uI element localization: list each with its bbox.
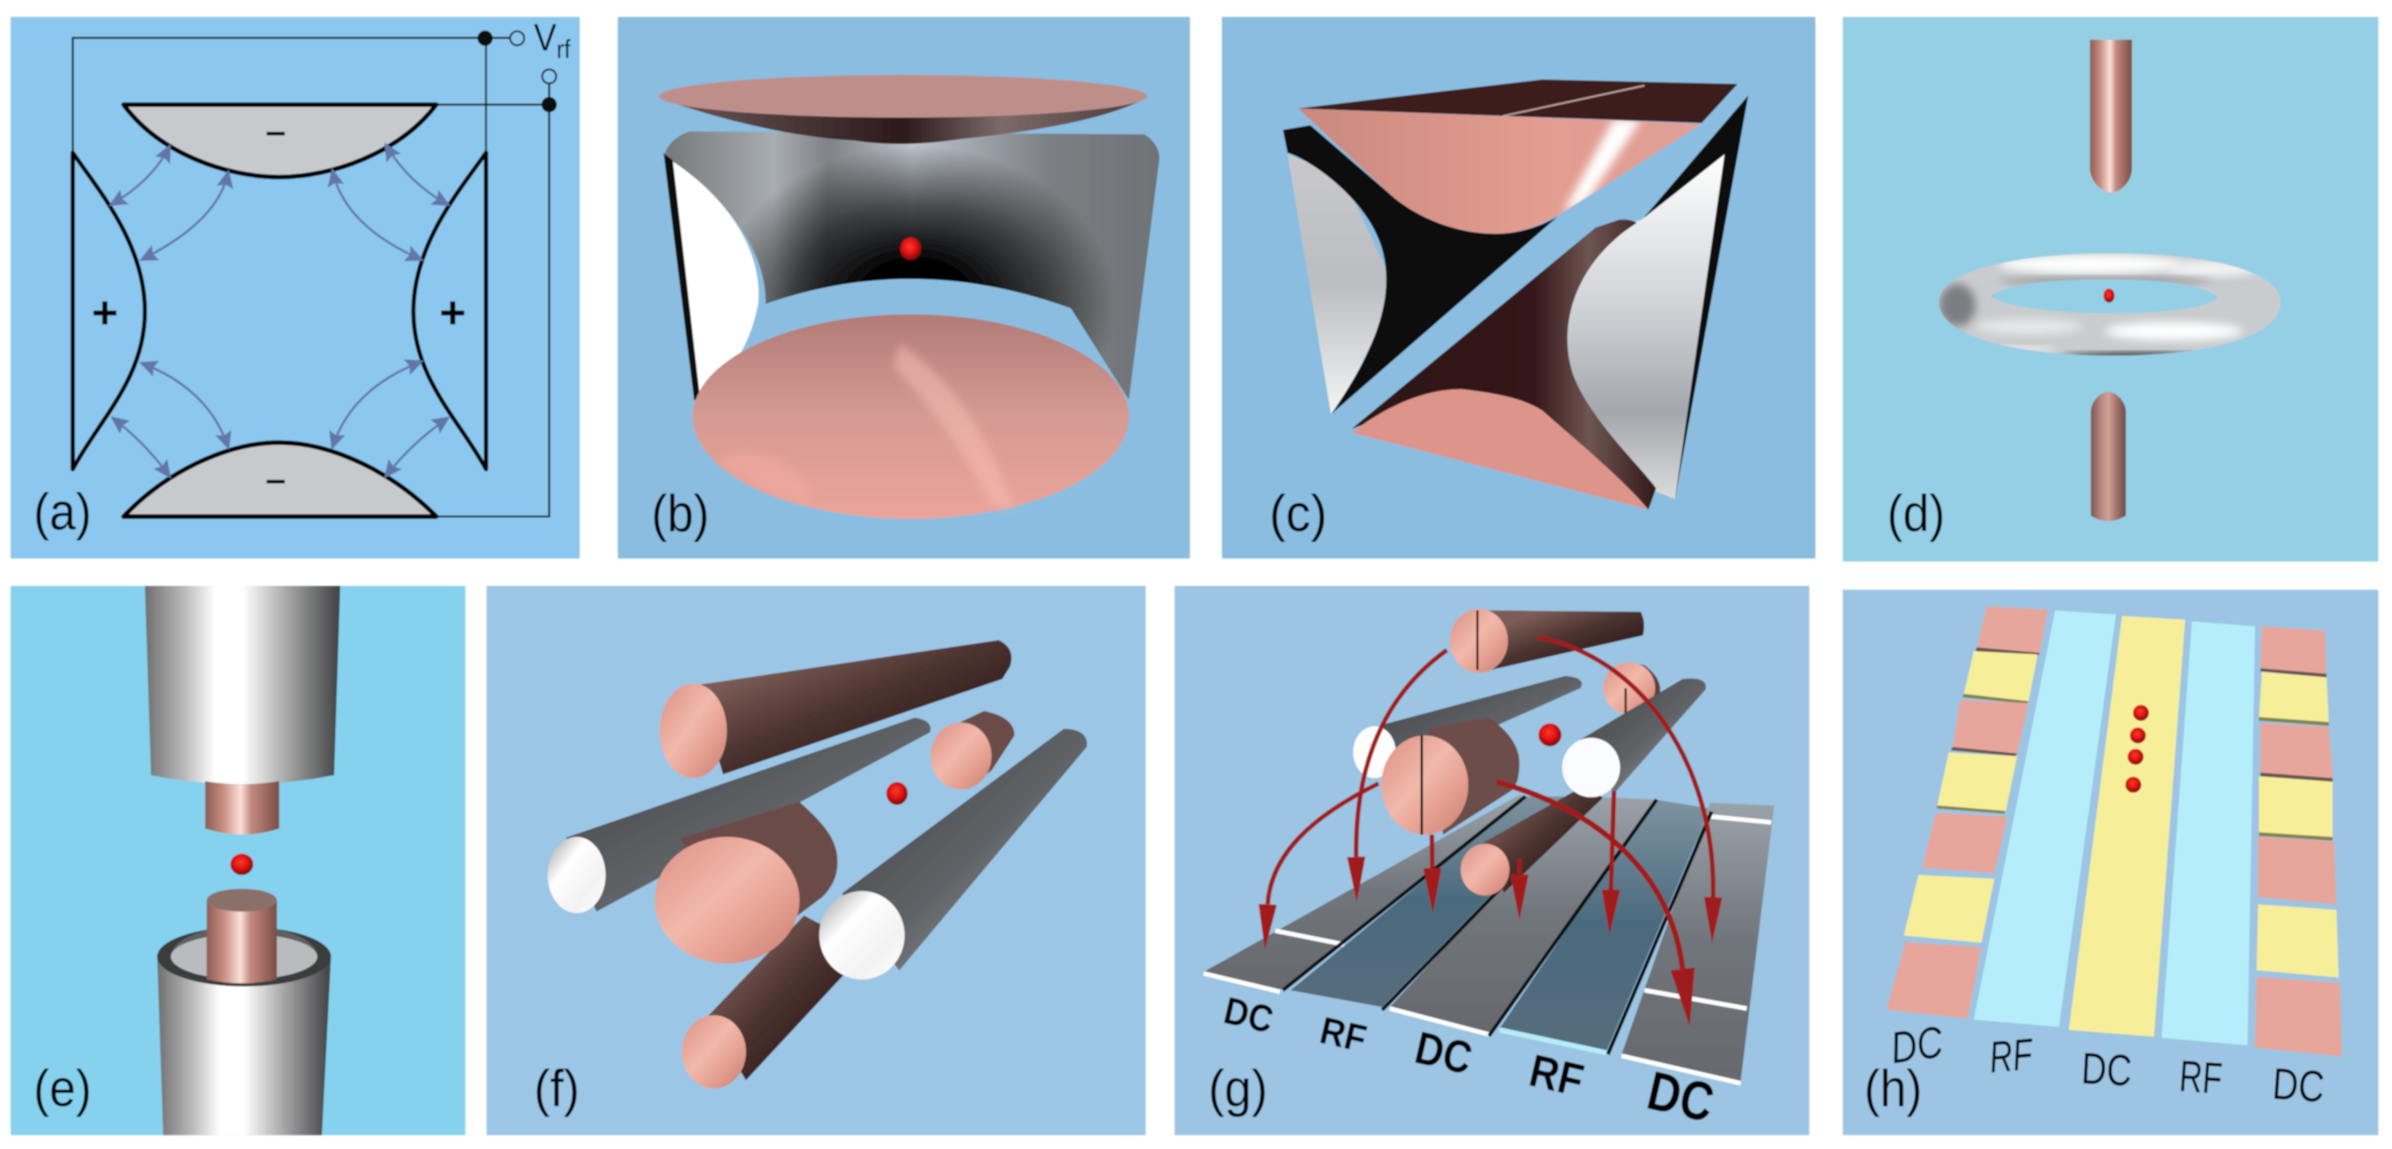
rod: large copper bbox=[655, 802, 838, 964]
strip labels: DC bbox=[1220, 989, 1277, 1042]
strip labels: RF bbox=[1987, 1030, 2036, 1083]
rod: upper grey bbox=[1353, 676, 1582, 778]
polarity signs: – bbox=[265, 458, 286, 499]
rf and dc rails bbox=[1974, 610, 2255, 1045]
ring electrode bbox=[664, 131, 1159, 401]
planar electrode strips bbox=[1204, 795, 1774, 1083]
ion bbox=[886, 782, 908, 805]
polarity signs: + bbox=[439, 287, 466, 338]
left segmented electrodes bbox=[1886, 606, 2048, 1019]
panel label f: (f) bbox=[534, 1059, 580, 1117]
lower shield cylinder bbox=[157, 926, 331, 1135]
panel (c): hyperbolic linear trap bbox=[1222, 17, 1815, 558]
strip labels: DC bbox=[1888, 1017, 1947, 1073]
field arrows bbox=[111, 145, 448, 476]
polarity signs: – bbox=[265, 111, 286, 152]
rod: small copper bbox=[1603, 662, 1660, 714]
bottom endcap bbox=[693, 314, 1129, 519]
wiring for Vrf bbox=[73, 38, 549, 517]
upper shield cylinder bbox=[145, 586, 340, 784]
panel label h: (h) bbox=[1864, 1059, 1922, 1117]
panel label e: (e) bbox=[34, 1059, 92, 1117]
strip labels: RF bbox=[1316, 1009, 1370, 1061]
panel (a): Paul trap cross-section bbox=[11, 16, 580, 558]
bottom maroon electrode bbox=[1352, 219, 1656, 510]
rod: lower copper bbox=[1461, 783, 1603, 896]
panel label c: (c) bbox=[1269, 484, 1327, 542]
right segmented electrodes bbox=[2255, 626, 2342, 1056]
strip labels: DC bbox=[2080, 1044, 2133, 1096]
strip labels bbox=[1220, 989, 1720, 1134]
ion bbox=[1538, 723, 1561, 746]
panel (f): linear rod trap bbox=[487, 586, 1146, 1135]
polarity signs: + bbox=[92, 287, 118, 338]
top electrode bbox=[124, 105, 436, 177]
panel (b): hyperbolic ring trap bbox=[618, 17, 1190, 558]
panel (d): ring and endcap trap bbox=[1843, 17, 2378, 562]
strip labels bbox=[1888, 1017, 2326, 1112]
top endcap rod bbox=[2090, 40, 2132, 192]
panel (g): rods projected to planar trap bbox=[1175, 586, 1809, 1135]
panel label g: (g) bbox=[1208, 1059, 1268, 1117]
rod: small copper bbox=[931, 711, 1014, 790]
ion chain bbox=[2125, 705, 2149, 793]
right silver electrode bbox=[1548, 95, 1748, 499]
strip labels: DC bbox=[1642, 1059, 1720, 1134]
bottom endcap rod bbox=[2091, 392, 2126, 521]
strip labels: DC bbox=[2271, 1060, 2326, 1112]
panel (e): needle trap bbox=[11, 586, 465, 1135]
right electrode bbox=[413, 153, 486, 469]
panel label a: (a) bbox=[34, 482, 92, 540]
terminal dots bbox=[477, 31, 557, 112]
panel label d: (d) bbox=[1887, 484, 1945, 542]
ion bbox=[230, 854, 253, 875]
rod: upper grey bbox=[548, 718, 931, 913]
polarity signs bbox=[92, 111, 466, 499]
rod: right grey bbox=[1562, 678, 1706, 797]
panel (h): surface electrode trap bbox=[1843, 590, 2378, 1135]
label: Vrf: rf bbox=[556, 36, 571, 64]
ion bbox=[2104, 289, 2115, 303]
rod: top copper bbox=[660, 640, 1011, 778]
left electrode bbox=[73, 153, 145, 469]
label: Vrf: V bbox=[534, 16, 559, 59]
strip labels: DC bbox=[1410, 1022, 1477, 1084]
top copper electrode bbox=[1298, 79, 1738, 234]
upper needle bbox=[205, 781, 279, 835]
ring electrode bbox=[1939, 253, 2281, 364]
bottom electrode bbox=[124, 443, 436, 517]
top endcap bbox=[659, 75, 1147, 144]
left silver electrode bbox=[1283, 125, 1558, 414]
lower needle bbox=[207, 889, 277, 983]
rod: top copper bbox=[1450, 609, 1644, 673]
surface electrodes bbox=[1886, 606, 2342, 1056]
rod: right grey bbox=[819, 729, 1087, 980]
rod: large copper bbox=[1381, 717, 1519, 835]
strip labels: RF bbox=[1525, 1045, 1588, 1107]
red field arrows bbox=[1268, 637, 1713, 969]
panel label b: (b) bbox=[651, 484, 709, 542]
ion bbox=[900, 237, 921, 260]
rod: lower copper bbox=[682, 915, 862, 1088]
strip labels: RF bbox=[2178, 1052, 2224, 1104]
